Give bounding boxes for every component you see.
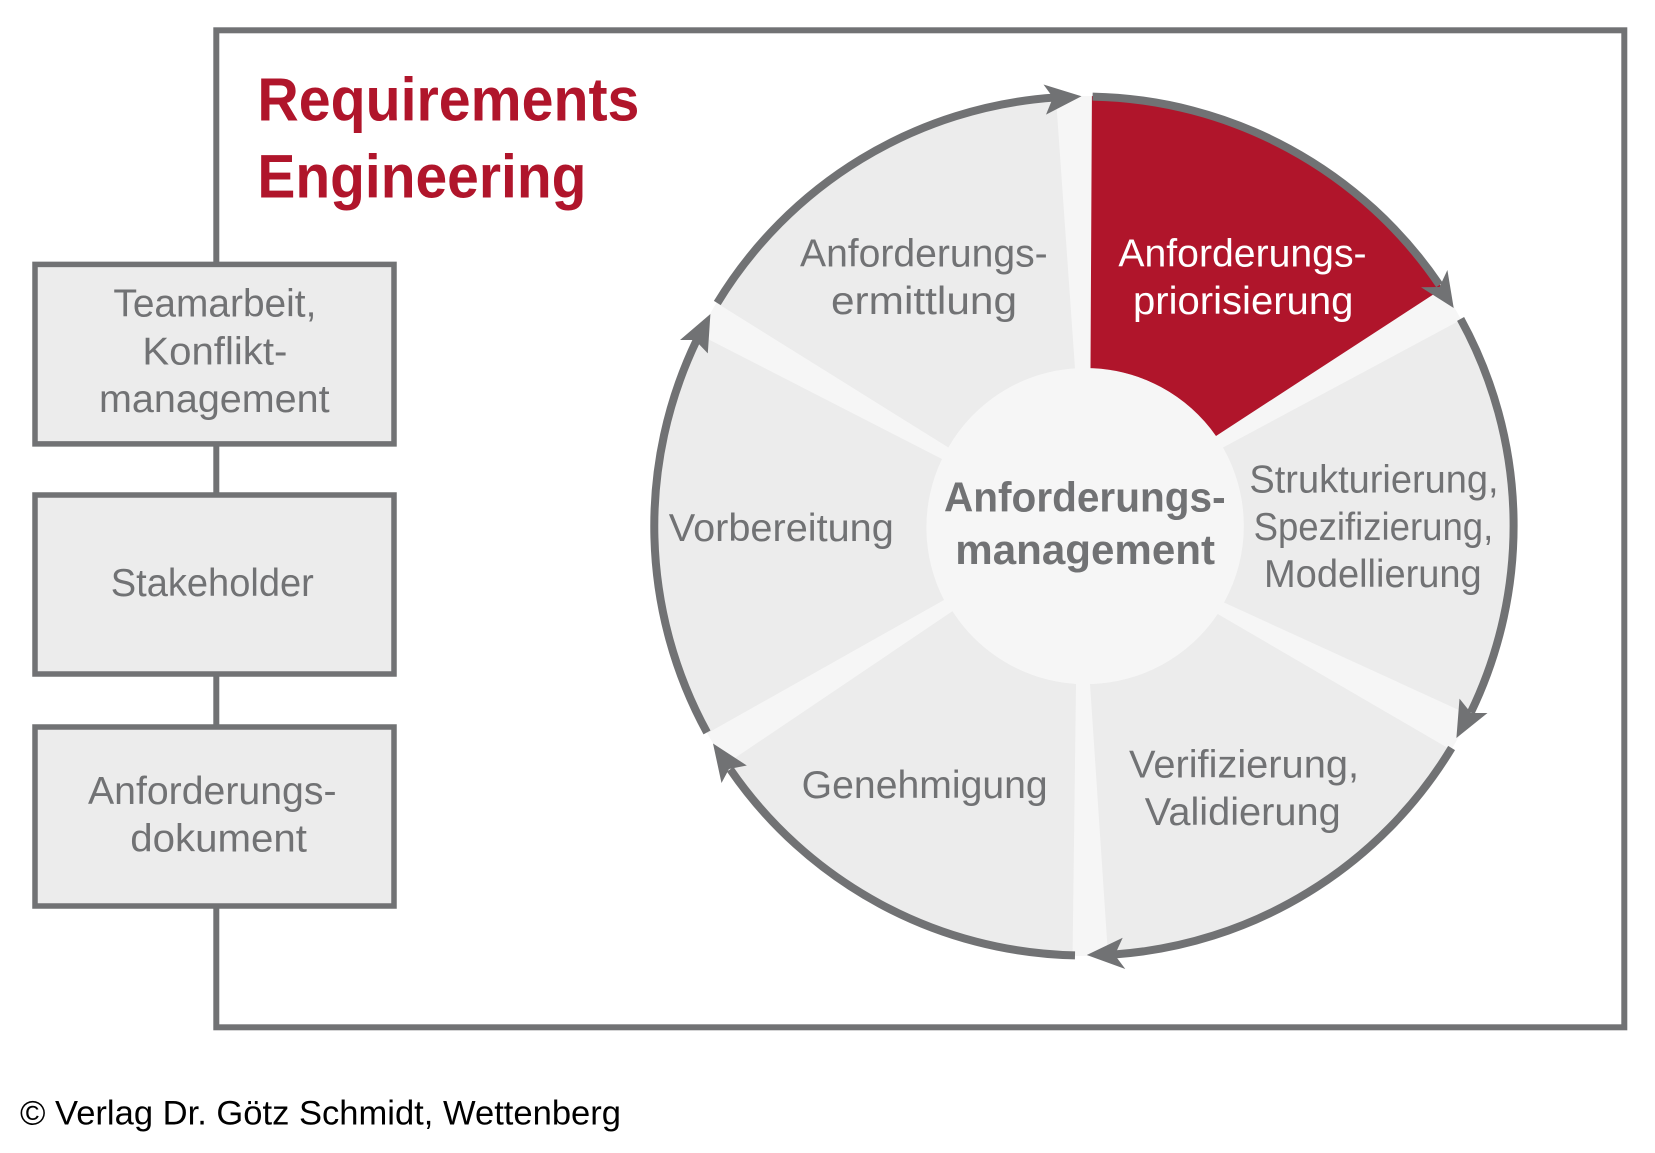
- arrow: vorbereitung to ermittlung: [654, 314, 710, 732]
- segment: Strukturierung: Strukturierung,: [1249, 458, 1499, 501]
- segment: Verifizierung: [1090, 614, 1447, 950]
- segment: Vorbereitung: Vorbereitung: [669, 507, 894, 550]
- box: Anforderungsdokument: Anforderungs-: [88, 770, 336, 813]
- box: Teamarbeit: Teamarbeit,: [113, 283, 316, 326]
- box: Teamarbeit: [35, 264, 394, 444]
- segment: Vorbereitung: [658, 340, 944, 733]
- segment: Anforderungspriorisierung (highlighted): priorisierung: [1133, 280, 1353, 323]
- box: Stakeholder: Stakeholder: [111, 562, 314, 605]
- segment: Strukturierung: Modellierung: [1264, 553, 1482, 596]
- arrow: priorisierung to strukturierung: [1093, 97, 1454, 308]
- wheel: [650, 84, 1518, 969]
- box: Anforderungsdokument: dokument: [130, 817, 307, 860]
- arrow: ermittlung to priorisierung: [717, 84, 1082, 303]
- arrow: strukturierung to verifizierung: [1456, 319, 1514, 738]
- wheel background disc: [654, 96, 1514, 956]
- box: Teamarbeit: management: [99, 378, 330, 421]
- segment: Strukturierung: Spezifizierung,: [1254, 506, 1493, 549]
- title: [257, 66, 639, 210]
- segment: Anforderungsermittlung: [721, 102, 1075, 447]
- segment: Anforderungspriorisierung (highlighted): Anforderungs-: [1118, 232, 1367, 275]
- segment: Strukturierung: [1224, 322, 1510, 710]
- box: Anforderungsdokument: [35, 727, 394, 906]
- arrow: verifizierung to genehmigung: [1087, 748, 1452, 969]
- arrow: genehmigung to vorbereitung: [713, 744, 1075, 955]
- centre circle: Anforderungsmanagement: Anforderungs-: [944, 473, 1226, 520]
- copyright footer: © Verlag Dr. Götz Schmidt, Wettenberg: [20, 1094, 621, 1132]
- frame: requirements engineering: [216, 30, 1624, 1027]
- segment: Verifizierung: Verifizierung,: [1129, 743, 1359, 786]
- centre circle: Anforderungsmanagement: management: [955, 526, 1215, 573]
- box: Stakeholder: [35, 495, 394, 674]
- segment: Anforderungsermittlung: ermittlung: [831, 280, 1017, 323]
- box: Teamarbeit: Konflikt-: [142, 330, 287, 373]
- title: Requirements: [257, 66, 639, 134]
- title: Engineering: [257, 142, 586, 210]
- segment: Genehmigung: [730, 612, 1076, 951]
- centre circle: Anforderungsmanagement: [928, 368, 1244, 684]
- segment: Genehmigung: Genehmigung: [802, 764, 1048, 807]
- segment: Verifizierung: Validierung: [1145, 791, 1341, 834]
- segment: Anforderungspriorisierung (highlighted): [1090, 96, 1440, 436]
- segment: Anforderungsermittlung: Anforderungs-: [800, 232, 1048, 275]
